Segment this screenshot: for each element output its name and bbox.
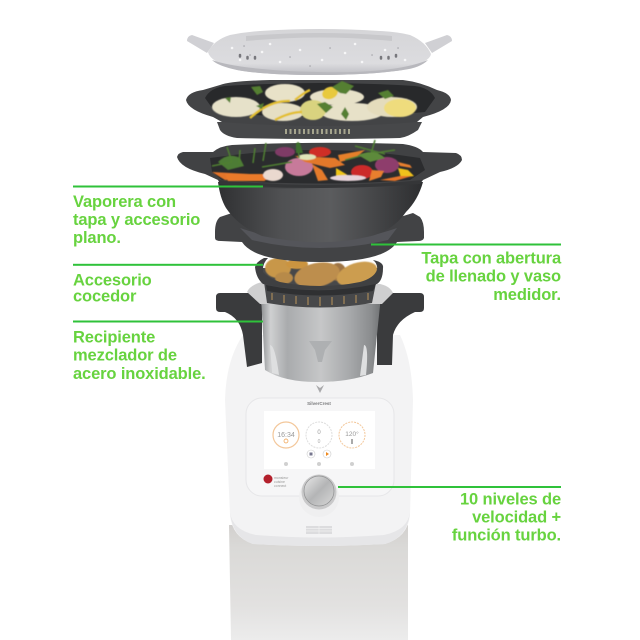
- speed knob: [299, 474, 339, 517]
- label: mixing bowl: acero inoxidable.: [73, 365, 206, 383]
- label: lid: Tapa con abertura: [421, 250, 562, 268]
- vent grille: [306, 526, 332, 534]
- label: steamer: plano.: [73, 229, 121, 247]
- label: steamer: tapa y accesorio: [73, 211, 200, 229]
- monsieur cuisine logo: cuisine: [274, 480, 285, 484]
- label: steamer: Vaporera con: [73, 193, 176, 211]
- leader line: cooking basket: [73, 264, 263, 266]
- label: lid: de llenado y vaso: [426, 268, 561, 286]
- monsieur cuisine logo: monsieur: [274, 476, 289, 480]
- label: speed: 10 niveles de: [460, 490, 561, 508]
- monsieur cuisine logo: connect: [274, 484, 286, 488]
- brand logo: SilverCrest: [307, 401, 331, 406]
- steamed vegetables: [212, 140, 414, 181]
- touch screen: 16:34: [277, 432, 295, 439]
- touch screen: 0: [318, 439, 321, 445]
- monsieur cuisine logo: [264, 474, 289, 488]
- label: speed: función turbo.: [452, 526, 561, 544]
- leader line: knob: [338, 486, 561, 488]
- label: cooking accessory: cocedor: [73, 288, 137, 306]
- label: speed: velocidad +: [472, 508, 561, 526]
- touch screen: 120°: [345, 430, 359, 438]
- lid with filling opening: [215, 213, 424, 262]
- label: cooking accessory: Accesorio: [73, 272, 152, 290]
- touch screen: 0: [317, 430, 321, 436]
- leader line: steamer: [73, 186, 263, 188]
- steamer lid: [187, 29, 452, 75]
- touch screen: [264, 411, 375, 469]
- appliance base: [225, 335, 413, 546]
- steamer: [177, 140, 462, 242]
- leader line: lid: [371, 244, 561, 246]
- label: lid: medidor.: [493, 286, 561, 304]
- reflection of the appliance: [229, 525, 408, 640]
- leader line: mixing bowl: [73, 320, 263, 322]
- cooking basket: [255, 257, 383, 308]
- label: mixing bowl: mezclador de: [73, 346, 177, 364]
- control panel: [246, 398, 394, 517]
- fish and lemon: [212, 81, 417, 121]
- stainless steel mixing bowl: [247, 282, 393, 393]
- potatoes: [265, 257, 380, 292]
- label: mixing bowl: Recipiente: [73, 328, 155, 346]
- tray accessory: [186, 80, 451, 139]
- mixing bowl handles: [216, 293, 424, 367]
